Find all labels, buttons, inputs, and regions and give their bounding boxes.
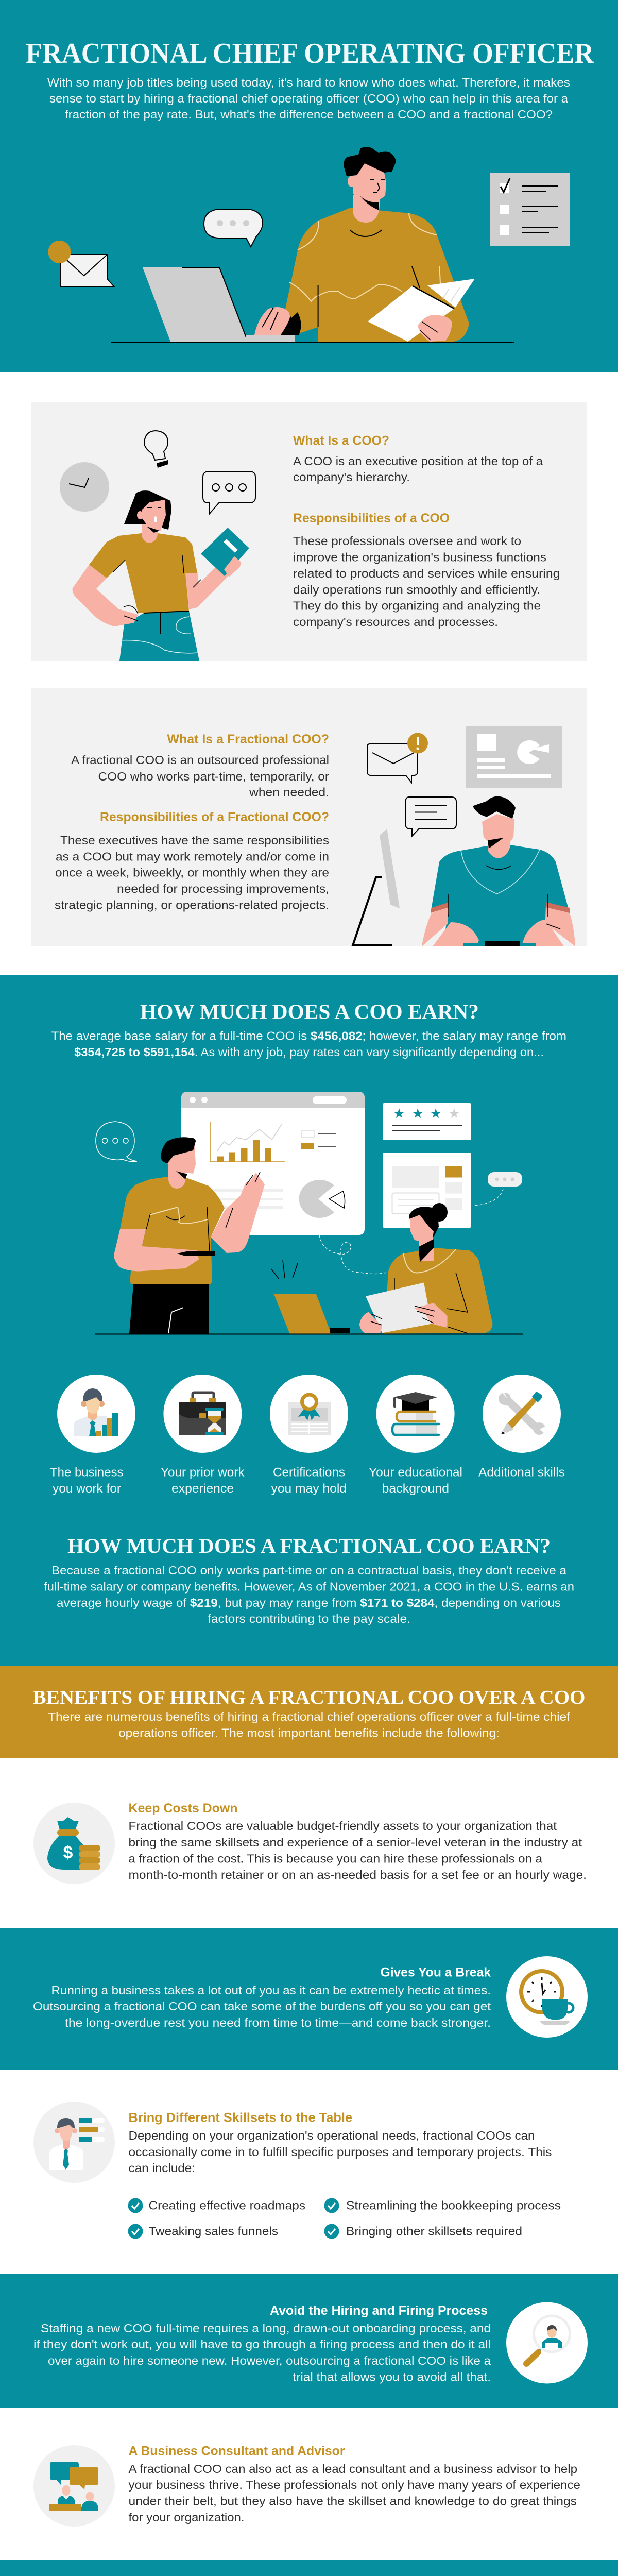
checklist: Tweaking sales funnels [148,2225,278,2238]
illustration: man at monitor [353,796,575,946]
labels [50,1465,565,1496]
icon: envelope [48,241,114,287]
review card: ★ [411,1106,424,1121]
labels: Certifications [273,1465,345,1480]
icon: briefcase [163,1375,242,1453]
checklist: Bringing other skillsets required [346,2225,522,2238]
text: what is a COO: These professionals oversee and work to [293,534,521,548]
text: over again to hire someone new. However, outsourcing a fractional COO is like a [48,2354,491,2367]
man presenting [114,1137,265,1334]
icon: graduation cap on books [376,1375,455,1453]
text: fractional COO [55,732,329,912]
fractional earnings text: average hourly wage of $219, but pay may range from $171 to $284 , depending on various [57,1596,561,1609]
neck and face [353,195,380,223]
text: bring the same skillsets and experience of a senior-level veteran in the industry at [129,1836,582,1849]
illustration: woman with book [60,431,255,661]
checklist: Creating effective roadmaps [148,2199,305,2212]
labels: background [382,1482,449,1496]
text: what is a COO: A COO is an executive position at the top of a [293,454,543,468]
sweater [282,208,469,342]
panel: hero header [0,0,618,372]
woman with paper [359,1203,493,1333]
text: what is a COO: company's hierarchy. [293,470,410,484]
icon: dashboard card [466,726,562,788]
icon: clock and cup [506,1956,588,2038]
icon: tools [483,1375,561,1453]
right hand [418,315,452,342]
desk line [111,342,514,343]
icon: clock [60,462,109,512]
labels: experience [171,1482,234,1496]
salary text: $354,725 to $591,154 . As with any job, pay rates can vary significantly depending on... [74,1045,544,1059]
illustration: presentation [95,1092,523,1334]
icon: chat bubble [203,471,255,514]
review card: ★ [393,1106,405,1121]
fractional earnings text: factors contributing to the pay scale. [208,1612,410,1625]
review card [383,1103,471,1140]
text: Outsourcing a fractional COO can take some of the burdens off you so you can get [33,1999,491,2013]
icon: light bulb [144,431,168,468]
panel: benefits banner [0,1666,618,1758]
icon: money bag [33,1803,115,1884]
text: Staffing a new COO full-time requires a long, drawn-out onboarding process, and [41,2321,491,2335]
text: your business thrive. These professionals not only have many years of experience [129,2478,580,2492]
text: fractional COO: What Is a Fractional COO? [167,732,329,747]
text: what is a COO: improve the organization's business functions [293,550,546,564]
text: fractional COO: These executives have the same responsibilities [60,834,329,847]
fractional earnings text: Because a fractional COO only works part-time or on a contractual basis, they don't receive a [52,1564,566,1577]
salary text: The average base salary for a full-time COO is $456,082; however, the salary may range from [52,1029,566,1043]
checklist: Streamlining the bookkeeping process [346,2199,561,2212]
text: A Business Consultant and Advisor [129,2444,345,2459]
icon: pill bubble with dashed path [319,1172,522,1274]
banner text [48,1710,571,1739]
labels: Additional skills [478,1465,565,1480]
icon: envelope alert [367,733,428,783]
banner text: There are numerous benefits of hiring a fractional chief operations officer over a full-time chief [48,1710,571,1723]
text: for your organization. [129,2511,244,2524]
icon: message bubble [406,797,456,836]
text [33,2303,491,2383]
text: Running a business takes a lot out of you as it can be extremely hectic at times. [52,1984,491,1997]
text: what is a COO: They do this by organizing and analyzing the [293,599,541,612]
text: what is a COO: What Is a COO? [293,434,389,448]
text: Fractional COOs are valuable budget-friendly assets to your organization that [129,1819,557,1833]
review card: ★ [430,1106,442,1121]
icon: certificate [270,1375,348,1453]
labels: Your prior work [161,1465,245,1480]
heading: BENEFITS OF HIRING A FRACTIONAL COO OVER A COO [33,1687,585,1708]
text [129,1801,587,1882]
benefit: gives you a break [0,1928,618,2070]
panel: what is a fractional COO [31,688,587,946]
panel: how much does a COO earn [0,975,618,1666]
icon: business [57,1375,135,1453]
icon: person with skill bars [33,2102,115,2183]
text: fractional COO: Responsibilities of a Fractional COO? [100,810,329,824]
layout card [383,1153,471,1228]
text [33,1965,491,2029]
fractional earnings text: full-time salary or company benefits. However, As of November 2021, a COO in the U.S. earns an [44,1580,574,1593]
text: what is a COO: company's resources and processes. [293,615,498,629]
papers [412,266,420,288]
laptop [271,1260,350,1333]
text: fractional COO: once a week, biweekly, or monthly when they are [55,866,329,879]
text: Bring Different Skillsets to the Table [129,2110,352,2125]
laptop [143,267,248,342]
benefit: consultant and advisor [33,2444,580,2527]
icon: money bag: $ [63,1843,73,1862]
text: Gives You a Break [380,1965,491,1979]
text: what is a COO: Responsibilities of a COO [293,511,450,526]
text: under their belt, but they also have the skillset and knowledge to do great things [129,2495,577,2508]
text: a fraction of the cost. This is because you can hire these professionals on a [129,1852,542,1865]
icon: speech bubble [204,209,263,247]
banner text: operations officer. The most important benefits include the following: [118,1726,500,1739]
text [129,2444,580,2524]
text: occasionally come in to fulfill specific purposes and temporary projects. This [129,2145,552,2159]
text: Keep Costs Down [129,1801,238,1816]
text [129,2110,552,2175]
heading: HOW MUCH DOES A COO EARN? [140,1000,479,1023]
text: what is a COO [293,434,560,629]
benefit: avoid hiring and firing [0,2274,618,2408]
text: can include: [129,2161,195,2175]
benefit: keep costs down [33,1801,587,1884]
icon row: pay factors [50,1375,565,1496]
review card: ★ [448,1106,460,1121]
browser window with chart [181,1092,365,1235]
text: what is a COO: related to products and services while ensuring [293,567,560,580]
text: what is a COO: daily operations run smoothly and efficiently. [293,583,540,597]
text: fractional COO: as a COO but may work remotely and/or come in [56,850,329,863]
intro text: sense to start by hiring a fractional chief operating officer (COO) who can help in this area for a [49,92,568,105]
labels: you may hold [271,1482,347,1496]
text: A fractional COO can also act as a lead consultant and a business advisor to help [129,2462,577,2476]
text: fractional COO: COO who works part-time, temporarily, or [98,770,329,783]
icon: magnifier with person [506,2302,588,2383]
fractional earnings text [44,1564,574,1625]
labels: you work for [53,1482,121,1496]
text: fractional COO: A fractional COO is an outsourced professional [71,753,329,767]
left hand [273,312,301,335]
intro text [47,76,570,121]
hair [344,147,396,176]
intro text: fraction of the pay rate. But, what's the difference between a COO and a fractional COO? [65,108,553,121]
labels: Your educational [369,1465,462,1480]
checklist [128,2198,561,2239]
text: the long-overdue rest you need from time to time—and come back stronger. [65,2016,491,2029]
benefit: different skillsets [33,2102,561,2239]
salary text [52,1029,566,1059]
text: fractional COO: needed for processing improvements, [117,882,329,895]
text: fractional COO: strategic planning, or operations-related projects. [55,899,329,912]
text: if they don't work out, you will have to go through a firing process and then do it all [33,2337,491,2351]
panel: what is a COO [31,402,587,661]
text: month-to-month retainer or on an as-needed basis for a set fee or an hourly wage. [129,1868,587,1882]
text: Avoid the Hiring and Firing Process [270,2303,488,2318]
title: FRACTIONAL CHIEF OPERATING OFFICER [26,38,594,70]
benefit: trustworthy and reliable [0,2560,618,2576]
illustration: man at laptop [111,147,514,343]
text: trial that allows you to avoid all that. [293,2370,491,2383]
icon: outline bubble [96,1122,137,1161]
heading: fractional earnings: HOW MUCH DOES A FRACTIONAL COO EARN? [67,1534,551,1557]
text: Depending on your organization's operational needs, fractional COOs can [129,2129,535,2142]
intro text: With so many job titles being used today, it's hard to know who does what. Therefore, it makes [47,76,570,89]
text: fractional COO: when needed. [249,786,329,799]
icon: advisors talking [33,2445,115,2527]
labels: The business [50,1465,124,1480]
icon: checklist [490,173,570,246]
